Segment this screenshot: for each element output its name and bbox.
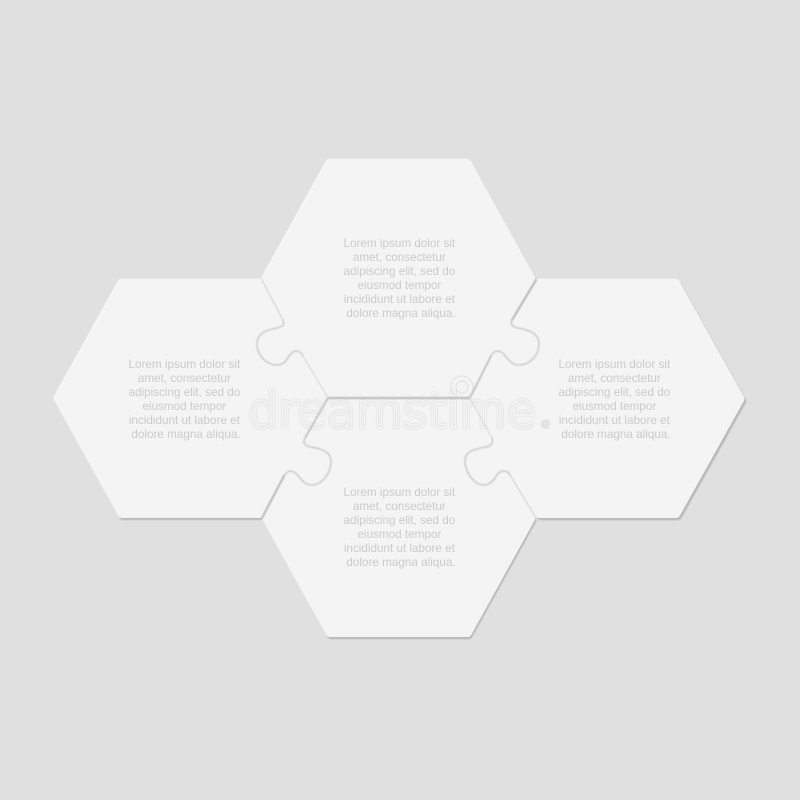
text block: right hexagon: eiusmod tempor <box>572 400 656 413</box>
panel: top hexagon <box>267 164 531 394</box>
text block: top hexagon: amet, consectetur <box>353 251 446 264</box>
text block: top hexagon: eiusmod tempor <box>357 279 441 292</box>
text block: top hexagon: adipiscing elit, sed do <box>343 265 456 278</box>
text block: right hexagon: adipiscing elit, sed do <box>558 386 671 399</box>
seam: bottom-left tab <box>262 398 331 518</box>
watermark: dreamstime <box>248 382 536 440</box>
seam: top-left tab <box>257 280 328 398</box>
seams: puzzle joints <box>257 280 539 518</box>
seam: top-right tab <box>470 280 539 398</box>
text block: right hexagon: amet, consectetur <box>568 372 661 385</box>
text block: bottom hexagon: amet, consectetur <box>353 500 446 513</box>
text block: left hexagon: adipiscing elit, sed do <box>128 386 241 399</box>
text block: top hexagon: Lorem ipsum dolor sit <box>344 237 456 250</box>
centre fill <box>266 285 532 514</box>
text block: right hexagon: Lorem ipsum dolor sit <box>559 358 671 371</box>
seam: centre horizontal joint <box>328 397 470 399</box>
text block: left hexagon: eiusmod tempor <box>142 400 226 413</box>
panel: right hexagon <box>475 284 740 514</box>
text block: top hexagon: dolore magna aliqua. <box>346 307 456 320</box>
panel: left hexagon <box>59 284 323 514</box>
text block: bottom hexagon: incididunt ut labore et <box>344 542 456 555</box>
text block: top hexagon: incididunt ut labore et <box>344 293 456 306</box>
text block: bottom hexagon: adipiscing elit, sed do <box>343 514 456 527</box>
panel: bottom hexagon <box>267 403 531 633</box>
text block: left hexagon: amet, consectetur <box>138 372 231 385</box>
text block: left hexagon: incididunt ut labore et <box>129 414 241 427</box>
text block: bottom hexagon: dolore magna aliqua. <box>346 556 456 569</box>
text block: right hexagon: incididunt ut labore et <box>559 414 671 427</box>
text block: left hexagon: Lorem ipsum dolor sit <box>129 358 241 371</box>
text block: left hexagon: dolore magna aliqua. <box>131 428 241 441</box>
hexagon shadows and highlights <box>58 163 742 635</box>
seam: bottom-right tab <box>465 398 536 518</box>
text block: bottom hexagon: Lorem ipsum dolor sit <box>344 486 456 499</box>
text block: bottom hexagon: eiusmod tempor <box>357 528 441 541</box>
watermark: dreamstime <box>248 382 536 440</box>
text block: right hexagon: dolore magna aliqua. <box>561 428 671 441</box>
